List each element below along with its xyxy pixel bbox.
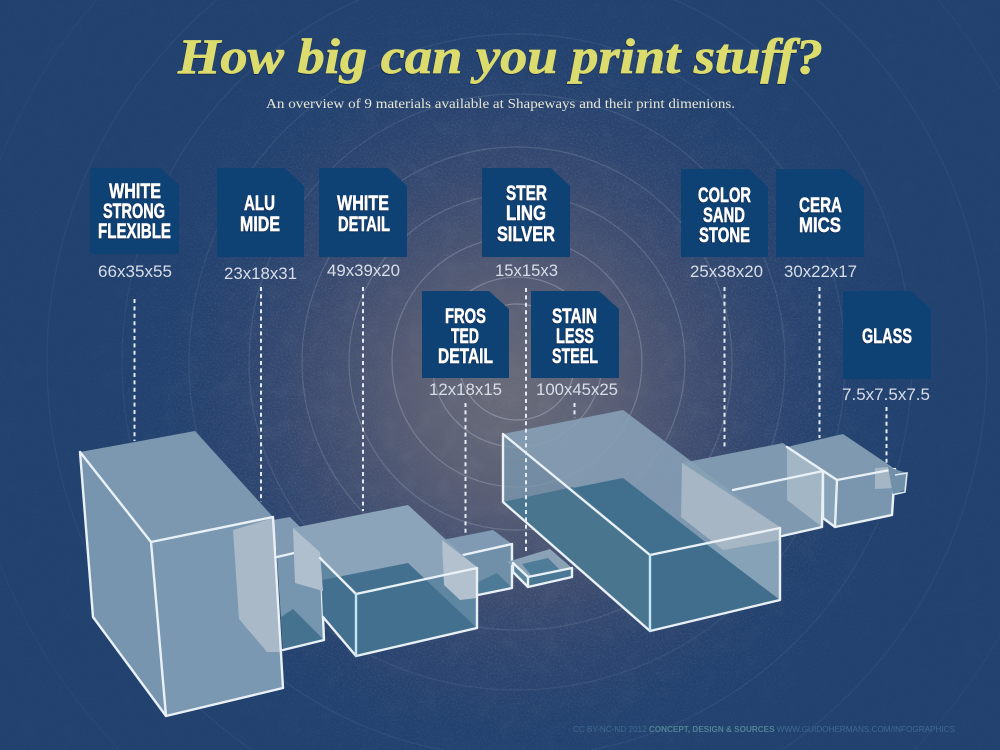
label: white detail: WHITE [337, 192, 389, 215]
label: white strong flexible: STRONG [103, 200, 165, 223]
label: alumide [217, 168, 304, 283]
label: white detail: 49x39x20 [327, 261, 400, 280]
3D boxes [80, 410, 907, 716]
label: alumide: MIDE [240, 213, 280, 236]
label: white strong flexible [90, 168, 179, 281]
label: white detail [319, 168, 407, 280]
label: stainless steel: 100x45x25 [536, 380, 618, 399]
label: alumide: 23x18x31 [224, 264, 297, 283]
label: sterling silver: SILVER [497, 223, 555, 246]
label: color sandstone: SAND [703, 204, 745, 227]
box: stainless steel [503, 410, 823, 631]
box: ceramics [787, 434, 895, 527]
box: frosted detail [442, 530, 512, 595]
label: frosted detail [422, 291, 509, 399]
box: alumide [273, 517, 324, 650]
label: ceramics [776, 169, 864, 281]
label: white strong flexible: 66x35x55 [98, 262, 172, 281]
footer credits: CC BY-NC-ND 2012 CONCEPT, DESIGN & SOURCES WWW.GUIDOHERMANS.COM/INFOGRAPHICS [573, 724, 955, 734]
box: sterling silver [507, 549, 572, 587]
label: ceramics: MICS [799, 214, 841, 237]
title: How big can you print stuff? [177, 28, 823, 84]
label: color sandstone: STONE [699, 224, 750, 247]
label: stainless steel [531, 291, 619, 399]
dashed leader lines [134, 287, 886, 534]
box: color sandstone [682, 443, 823, 536]
label: ceramics: 30x22x17 [784, 262, 857, 281]
label: white strong flexible: FLEXIBLE [98, 220, 171, 243]
label: frosted detail: 12x18x15 [429, 380, 502, 399]
box: white strong flexible [80, 431, 283, 716]
label: white detail: DETAIL [338, 213, 390, 236]
box: glass [888, 467, 907, 495]
label: sterling silver: LING [506, 202, 546, 225]
leader line: sterling silver [525, 288, 527, 552]
label: glass: GLASS [862, 325, 912, 348]
label: ceramics: CERA [799, 194, 842, 217]
label: sterling silver: STER [506, 182, 547, 205]
label: alumide: ALU [244, 192, 275, 215]
label: sterling silver: 15x15x3 [495, 261, 558, 280]
label: color sandstone [681, 169, 768, 281]
subtitle: An overview of 9 materials available at Shapeways and their print dimenions. [266, 97, 735, 112]
label: glass [842, 291, 931, 404]
label: frosted detail: FROS [445, 305, 486, 328]
box: white detail [293, 505, 477, 656]
label: color sandstone: 25x38x20 [690, 262, 763, 281]
label: stainless steel: STAIN [552, 305, 597, 328]
label: frosted detail: DETAIL [438, 345, 493, 368]
label: color sandstone: COLOR [698, 184, 751, 207]
label: glass: 7.5x7.5x7.5 [842, 385, 930, 404]
label: stainless steel: LESS [556, 325, 594, 348]
label: frosted detail: TED [451, 325, 479, 348]
label: white strong flexible: WHITE [109, 180, 161, 203]
label: stainless steel: STEEL [552, 345, 598, 368]
label: sterling silver [482, 168, 570, 280]
